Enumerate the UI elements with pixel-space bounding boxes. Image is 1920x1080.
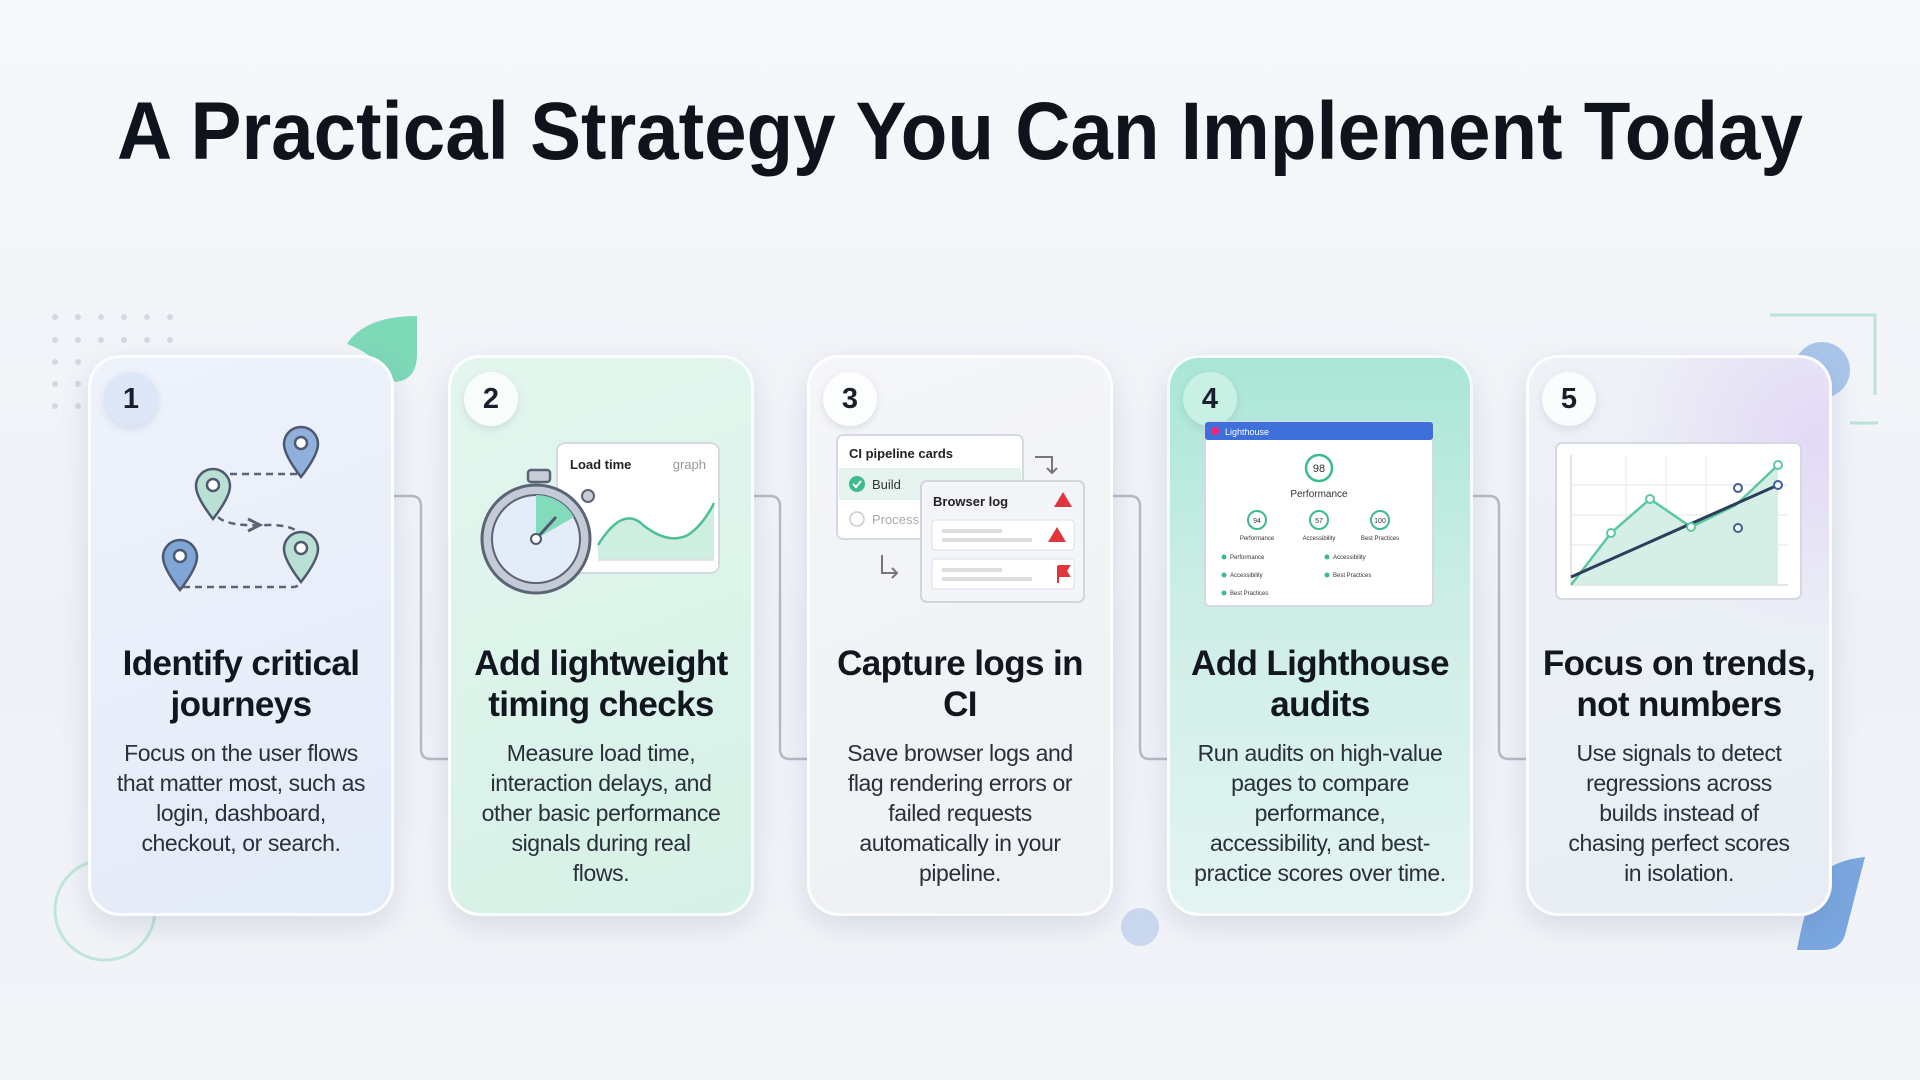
icon: lighthouse report: Accessibility	[1333, 555, 1366, 561]
text 2: Measure load time,	[507, 740, 695, 766]
icon: stopwatch with load time graph: graph	[673, 457, 706, 472]
text 2: other basic performance	[482, 800, 720, 826]
icon: lighthouse report: 98	[1313, 463, 1325, 475]
icon: CI pipeline and browser log cards: Browser log	[933, 494, 1008, 509]
panel: step 4	[1167, 355, 1473, 916]
text 4: Run audits on high-value	[1198, 740, 1442, 766]
icon: CI pipeline and browser log cards: CI pipeline cards	[849, 446, 953, 461]
heading 1: Identify critical	[123, 644, 359, 683]
number badge 5: 5	[1561, 383, 1577, 415]
icon: lighthouse report: Best Practices	[1333, 573, 1371, 579]
number badge 5	[1542, 372, 1596, 426]
text 4	[1194, 740, 1446, 886]
number badge 1	[104, 372, 158, 426]
text 2	[482, 740, 720, 886]
text 5: regressions across	[1586, 770, 1772, 796]
icon: CI pipeline and browser log cards	[836, 434, 1085, 603]
icon: lighthouse report: Performance	[1290, 489, 1348, 500]
text 2: signals during real	[511, 830, 691, 856]
text 3: Save browser logs and	[847, 740, 1073, 766]
panel: step 2	[448, 355, 754, 916]
heading 4	[1191, 644, 1449, 724]
title: A Practical Strategy You Can Implement Today	[117, 86, 1803, 177]
panel: step 5	[1526, 355, 1832, 916]
text 1	[117, 740, 365, 856]
decoration: top right bracket and circle	[1770, 314, 1878, 424]
text 5: Use signals to detect	[1576, 740, 1782, 766]
text 3: automatically in your	[859, 830, 1061, 856]
heading 3	[837, 644, 1083, 724]
icon: lighthouse report: Best Practices	[1230, 591, 1268, 597]
icon: lighthouse report: 94	[1253, 518, 1261, 525]
icon: CI pipeline and browser log cards: Build	[872, 477, 901, 492]
number badge 4: 4	[1202, 383, 1218, 415]
icon: lighthouse report: Best Practices	[1361, 536, 1399, 542]
heading 5	[1543, 644, 1815, 724]
icon: lighthouse report: 57	[1315, 518, 1323, 525]
text 4: performance,	[1255, 800, 1385, 826]
text 1: that matter most, such as	[117, 770, 365, 796]
heading 2: Add lightweight	[474, 644, 728, 683]
text 5: in isolation.	[1624, 860, 1734, 886]
decoration: circle outline	[54, 862, 156, 962]
number badge 2	[464, 372, 518, 426]
decoration: blue blob	[1121, 908, 1159, 946]
text 4: accessibility, and best-	[1210, 830, 1430, 856]
icon: stopwatch with load time graph	[480, 442, 720, 594]
text 1: checkout, or search.	[141, 830, 341, 856]
text 3: failed requests	[888, 800, 1032, 826]
text 2: interaction delays, and	[491, 770, 711, 796]
heading 4: Add Lighthouse	[1191, 644, 1449, 683]
text 3: flag rendering errors or	[848, 770, 1072, 796]
icon: lighthouse report	[1204, 421, 1434, 607]
text 5: chasing perfect scores	[1568, 830, 1790, 856]
icon: CI pipeline and browser log cards: Process	[872, 512, 919, 527]
decoration: green leaf	[347, 316, 417, 382]
heading 2: timing checks	[488, 685, 714, 724]
decoration: dot grid	[52, 314, 173, 409]
icon: map pins journey	[162, 426, 320, 592]
heading 4: audits	[1270, 685, 1370, 724]
icon: trend line chart	[1555, 442, 1802, 600]
panel: step 3	[807, 355, 1113, 916]
panel: step 1	[88, 355, 394, 916]
text 4: practice scores over time.	[1194, 860, 1446, 886]
text 1: login, dashboard,	[156, 800, 326, 826]
heading 3: CI	[943, 685, 977, 724]
number badge 1: 1	[123, 383, 139, 415]
text 5: builds instead of	[1599, 800, 1759, 826]
icon: lighthouse report: Lighthouse	[1225, 427, 1269, 437]
number badge 3	[823, 372, 877, 426]
number badge 4	[1183, 372, 1237, 426]
decoration: blue shape bottom right	[1797, 857, 1865, 950]
icon: stopwatch with load time graph: Load time	[570, 457, 631, 472]
heading 1: journeys	[170, 685, 312, 724]
icon: lighthouse report: Performance	[1240, 536, 1275, 542]
text 2: flows.	[573, 860, 629, 886]
number badge 3: 3	[842, 383, 858, 415]
icon: lighthouse report: Accessibility	[1230, 573, 1263, 579]
icon: lighthouse report: 100	[1374, 518, 1386, 525]
heading 5: Focus on trends,	[1543, 644, 1815, 683]
text 1: Focus on the user flows	[124, 740, 358, 766]
text 5	[1568, 740, 1790, 886]
heading 5: not numbers	[1576, 685, 1782, 724]
number badge 2: 2	[483, 383, 499, 415]
text 4: pages to compare	[1231, 770, 1409, 796]
icon: lighthouse report: Performance	[1230, 555, 1265, 561]
text 3	[847, 740, 1073, 886]
heading 3: Capture logs in	[837, 644, 1083, 683]
heading 2	[474, 644, 728, 724]
heading 1	[123, 644, 359, 724]
icon: lighthouse report: Accessibility	[1303, 536, 1335, 542]
text 3: pipeline.	[919, 860, 1001, 886]
